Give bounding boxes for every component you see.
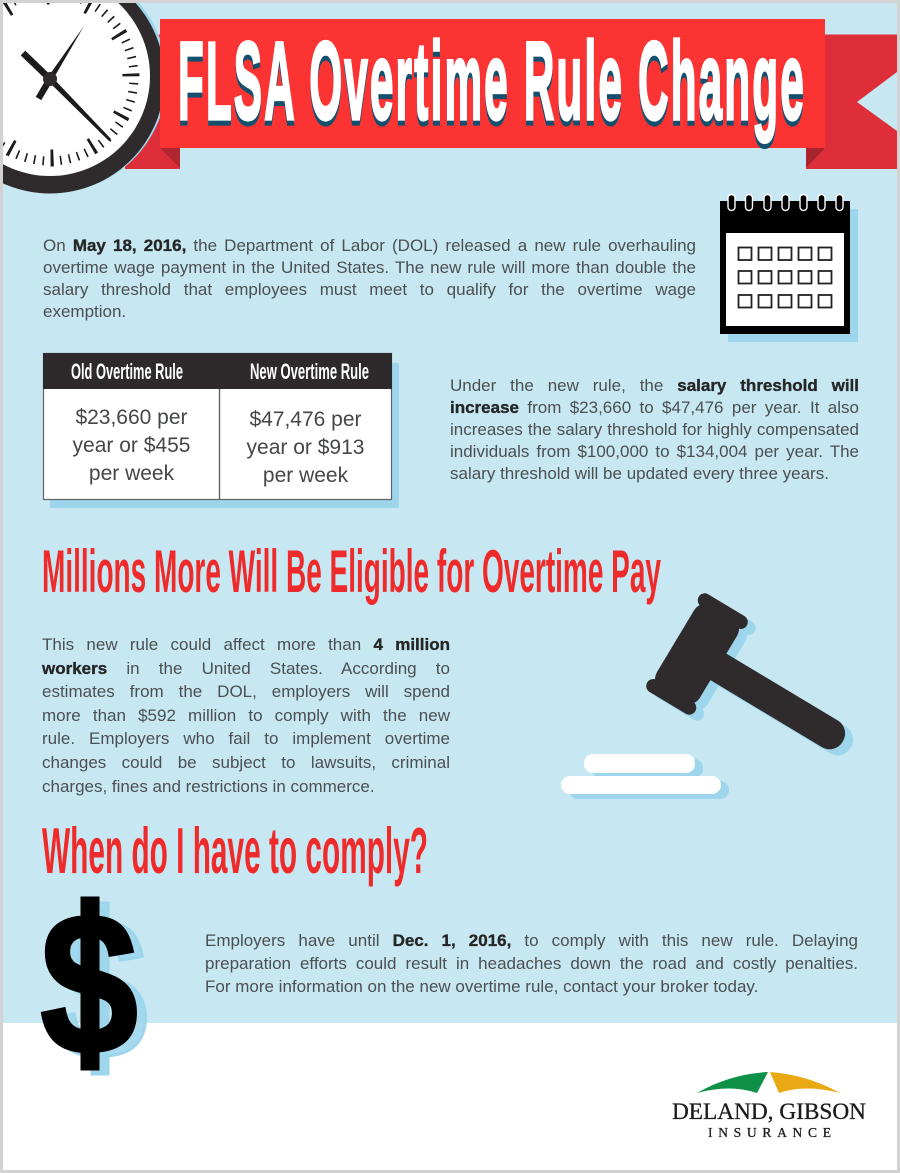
table cell: new rule: $47,476 per — [249, 408, 362, 431]
table cell: new rule: per week — [263, 464, 348, 487]
icon: gavel — [561, 591, 880, 799]
logo: Deland, Gibson Insurance — [672, 1072, 866, 1140]
salary threshold paragraph: increase from $23,660 to $47,476 per year. It also — [450, 398, 859, 417]
salary threshold paragraph: salary threshold will be updated every three years. — [450, 464, 829, 483]
salary threshold paragraph: increases the salary threshold for highly compensated — [450, 420, 859, 439]
eligibility paragraph: charges, fines and restrictions in commerce. — [42, 777, 375, 796]
eligibility paragraph — [42, 635, 450, 796]
icon: clock — [0, 0, 167, 194]
table cell: old rule — [72, 406, 190, 485]
full page artwork: When do I have to comply? — [42, 814, 428, 887]
intro paragraph: exemption. — [43, 302, 126, 321]
icon: calendar — [720, 194, 858, 342]
eligibility paragraph: This new rule could affect more than 4 million — [42, 635, 450, 654]
table header: new rule: New Overtime Rule — [250, 359, 369, 384]
table cell: old rule: year or $455 — [73, 434, 190, 457]
table cell: old rule: per week — [89, 462, 174, 485]
table cell: new rule: year or $913 — [247, 436, 364, 459]
salary threshold paragraph: individuals from $100,000 to $134,004 per year. The — [450, 442, 859, 461]
eligibility paragraph: changes could be subject to lawsuits, criminal — [42, 753, 450, 772]
table header: old rule: Old Overtime Rule — [71, 359, 183, 384]
eligibility paragraph: workers in the United States. According to — [42, 659, 450, 678]
ribbon back tails — [125, 34, 897, 169]
eligibility paragraph: estimates from the DOL, employers will spend — [42, 682, 450, 701]
logo: Deland, Gibson Insurance: INSURANCE — [708, 1125, 831, 1140]
compliance paragraph: For more information on the new overtime rule, contact your broker today. — [205, 977, 758, 996]
intro paragraph — [43, 236, 696, 321]
eligibility paragraph: more than $592 million to comply with the new — [42, 706, 450, 725]
table cell: new rule — [246, 408, 364, 487]
icon: dollar sign: $ — [40, 871, 138, 1097]
title banner — [160, 19, 825, 148]
intro paragraph: On May 18, 2016, the Department of Labor (DOL) released a new rule overhauling — [43, 236, 696, 255]
compliance paragraph: preparation efforts could result in headaches down the road and costly penalties. — [205, 954, 858, 973]
icon: dollar sign: $ — [50, 876, 148, 1102]
salary threshold paragraph — [450, 376, 859, 483]
eligibility paragraph: rule. Employers who fail to implement overtime — [42, 729, 450, 748]
salary threshold paragraph: Under the new rule, the salary threshold will — [450, 376, 859, 395]
table cell: old rule: $23,660 per — [75, 406, 188, 429]
compliance paragraph — [205, 931, 858, 996]
table background — [43, 353, 399, 508]
logo: Deland, Gibson Insurance: DELAND, GIBSON — [672, 1099, 866, 1124]
intro paragraph: overtime wage payment in the United States. The new rule will more than double the — [43, 258, 696, 277]
compliance paragraph: Employers have until Dec. 1, 2016, to comply with this new rule. Delaying — [205, 931, 858, 950]
intro paragraph: salary threshold that employees must meet to qualify for the overtime wage — [43, 280, 696, 299]
